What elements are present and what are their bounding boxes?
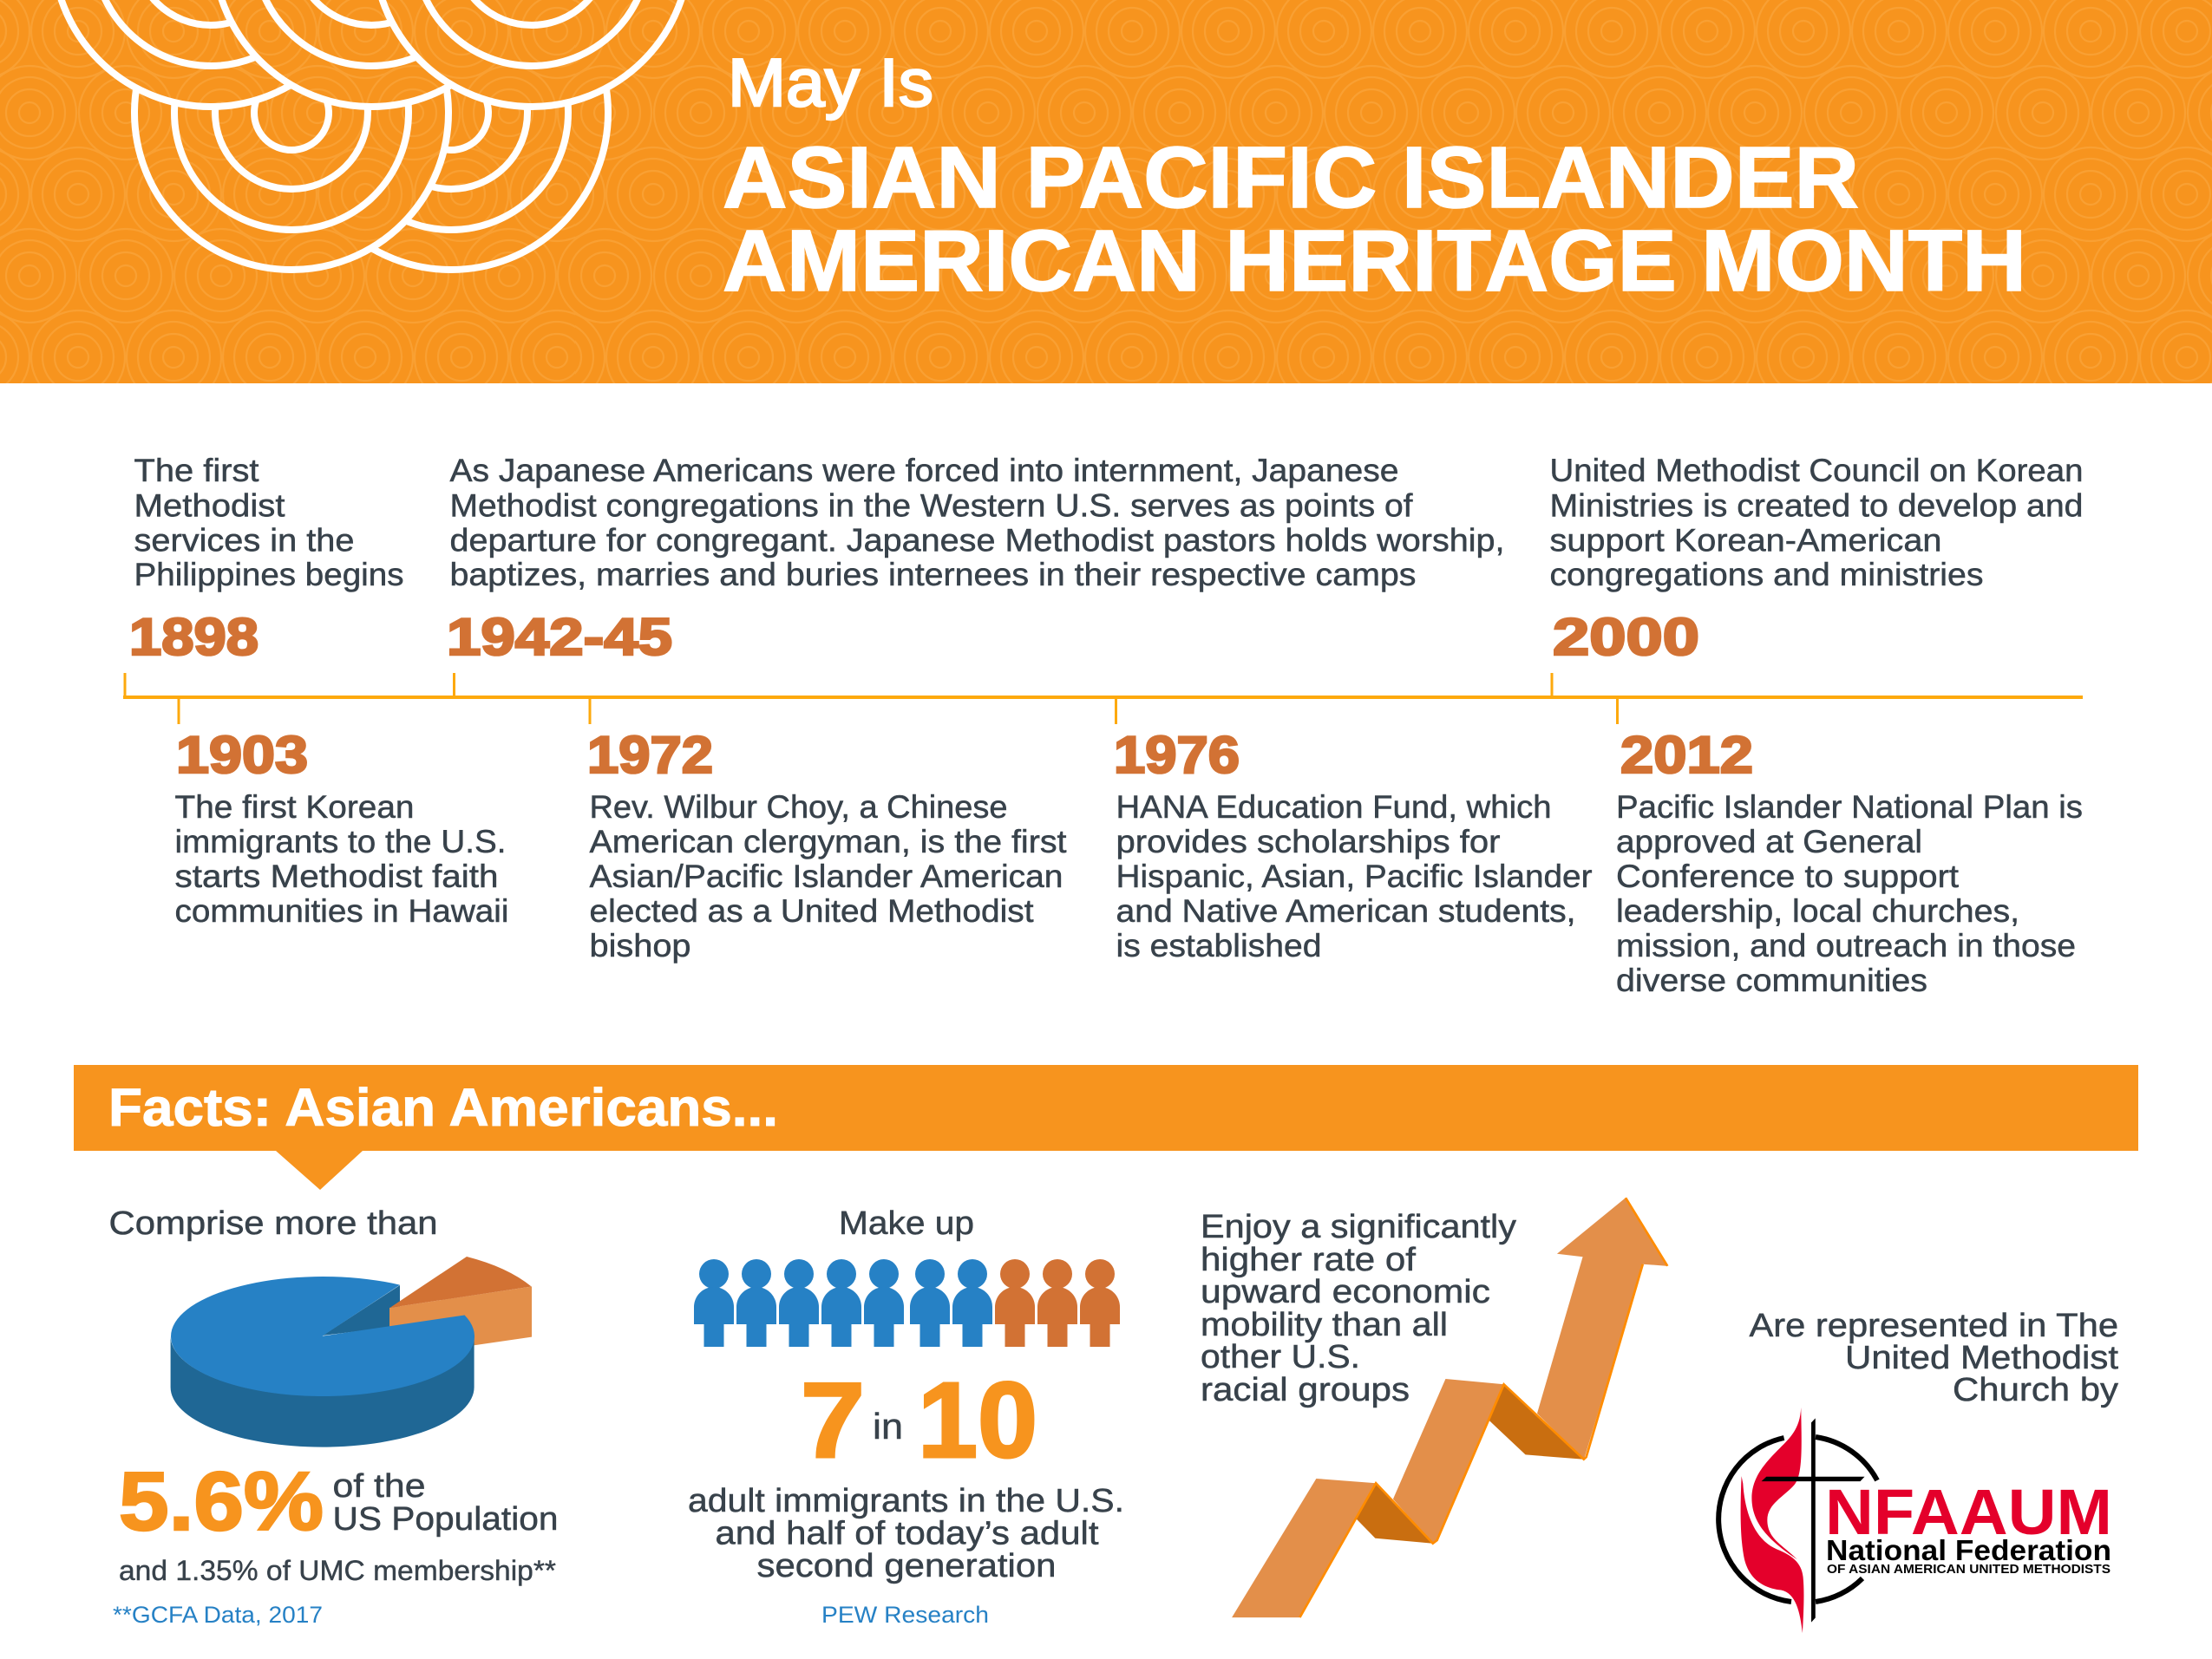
fact panel: population share: 5.6% [119, 1455, 324, 1548]
fact panel: 7 in 10 immigrants: PEW Research [821, 1602, 989, 1628]
fact panel: economic mobility: racial groups [1201, 1372, 1410, 1408]
timeline event: 1942-45: departure for congregant. Japanese Methodist pastors holds worship, [449, 522, 1504, 558]
timeline event: 2000: congregations and ministries [1549, 557, 1983, 592]
timeline event: 1972: bishop [590, 928, 690, 963]
fact panel: economic mobility: other U.S. [1201, 1339, 1360, 1375]
fact panel: economic mobility: upward economic [1201, 1274, 1490, 1310]
header banner [0, 0, 2212, 383]
timeline event: 2012: Conference to support [1616, 859, 1960, 894]
fact panel: population share [109, 1205, 559, 1628]
fact panel: 7 in 10 immigrants [688, 1205, 1124, 1628]
icon: rising zigzag arrow [1232, 1198, 1667, 1617]
logo: NFAAUM cross and flame: NFAAUM [1825, 1476, 2112, 1548]
timeline axis [123, 673, 2083, 724]
logo: NFAAUM cross and flame [1718, 1408, 2112, 1633]
fact panel: population share: **GCFA Data, 2017 [113, 1602, 323, 1628]
timeline event: 1972: American clergyman, is the first [590, 824, 1067, 859]
timeline event: 2012: leadership, local churches, [1616, 893, 2019, 929]
fact panel: population share: US Population [333, 1501, 559, 1538]
timeline event: 1903: immigrants to the U.S. [175, 824, 507, 859]
fact panel: 7 in 10 immigrants: in [873, 1406, 903, 1447]
timeline event: 2000: United Methodist Council on Korean [1549, 453, 2084, 488]
timeline event: 1898 [129, 453, 403, 666]
timeline event: 1942-45: baptizes, marries and buries internees in their respective camps [449, 557, 1416, 592]
facts heading bar [74, 1065, 2138, 1190]
fact panel: represented by NFAAUM: Are represented in The [1749, 1308, 2118, 1344]
timeline event: 1972: elected as a United Methodist [590, 893, 1034, 929]
title: ASIAN PACIFIC ISLANDER [723, 129, 1859, 226]
fact panel: population share: Comprise more than [109, 1205, 437, 1242]
timeline event: 1903 [175, 726, 508, 929]
timeline event: 2012 [1616, 726, 2083, 998]
icon: concentric circles emblem [53, 0, 690, 270]
timeline event: 2012: mission, and outreach in those [1616, 928, 2076, 963]
timeline event: 2012: 2012 [1620, 726, 1753, 784]
title: May Is [728, 44, 933, 121]
fact panel: 7 in 10 immigrants: 7 [801, 1362, 865, 1480]
timeline event: 1976 [1114, 726, 1593, 963]
fact panel: population share: and 1.35% of UMC membership** [119, 1555, 556, 1586]
title [723, 44, 2026, 310]
timeline event: 1976: and Native American students, [1116, 893, 1575, 929]
timeline event: 1976: Hispanic, Asian, Pacific Islander [1116, 859, 1593, 894]
fact panel: 7 in 10 immigrants: second generation [756, 1548, 1057, 1584]
timeline event: 1976: is established [1116, 928, 1322, 963]
timeline event: 1972 [587, 726, 1067, 963]
fact panel: economic mobility: Enjoy a significantly [1201, 1209, 1516, 1245]
timeline event: 1903: communities in Hawaii [175, 893, 508, 929]
timeline event: 1898: Methodist [134, 487, 285, 524]
timeline event: 1976: HANA Education Fund, which [1116, 789, 1551, 825]
timeline event: 1942-45: 1942-45 [447, 608, 672, 666]
fact panel: represented by NFAAUM: United Methodist [1845, 1340, 2118, 1376]
timeline event: 1898: 1898 [129, 608, 259, 666]
timeline event: 1972: Rev. Wilbur Choy, a Chinese [590, 789, 1008, 825]
timeline event: 2000: 2000 [1553, 608, 1699, 666]
logo: NFAAUM cross and flame: National Federation [1826, 1534, 2111, 1566]
logo: NFAAUM cross and flame: OF ASIAN AMERICAN UNITED METHODISTS [1827, 1563, 2111, 1577]
timeline event: 1972: 1972 [587, 726, 713, 784]
timeline event: 1976: 1976 [1114, 726, 1240, 784]
timeline event: 2012: approved at General [1616, 824, 1922, 859]
timeline event: 2012: Pacific Islander National Plan is [1616, 789, 2083, 825]
fact panel: economic mobility: higher rate of [1201, 1242, 1416, 1278]
title: AMERICAN HERITAGE MONTH [723, 212, 2026, 310]
timeline event: 2000: support Korean-American [1549, 522, 1941, 558]
timeline event: 2000: Ministries is created to develop and [1549, 487, 2084, 524]
timeline event: 1898: services in the [134, 522, 354, 558]
fact panel: 7 in 10 immigrants: 10 [918, 1362, 1037, 1480]
fact panel: population share: of the [333, 1468, 425, 1505]
facts heading bar: Facts: Asian Americans... [108, 1078, 778, 1137]
pie chart [171, 1257, 532, 1447]
fact panel: economic mobility [1201, 1198, 1667, 1617]
timeline event: 1942-45: As Japanese Americans were forced into internment, Japanese [449, 453, 1398, 488]
pictogram: ten people [694, 1259, 1120, 1347]
timeline event: 1942-45: Methodist congregations in the Western U.S. serves as points of [449, 487, 1413, 524]
timeline event: 1898: Philippines begins [134, 557, 403, 592]
timeline event: 1898: The first [134, 453, 259, 488]
timeline event: 1976: provides scholarships for [1116, 824, 1501, 859]
timeline event: 1903: The first Korean [175, 789, 415, 825]
fact panel: 7 in 10 immigrants: Make up [839, 1205, 974, 1242]
timeline event: 1972: Asian/Pacific Islander American [590, 859, 1063, 894]
timeline event: 2000 [1549, 453, 2084, 666]
timeline event: 1903: 1903 [176, 726, 308, 784]
fact panel: represented by NFAAUM: Church by [1953, 1372, 2118, 1408]
timeline event: 1903: starts Methodist faith [175, 859, 498, 894]
timeline event: 2012: diverse communities [1616, 963, 1927, 998]
fact panel: 7 in 10 immigrants: and half of today’s adult [715, 1516, 1099, 1552]
timeline event: 1942-45 [447, 453, 1504, 666]
fact panel: represented by NFAAUM [1718, 1308, 2118, 1633]
fact panel: 7 in 10 immigrants: adult immigrants in the U.S. [688, 1483, 1124, 1519]
fact panel: economic mobility: mobility than all [1201, 1307, 1448, 1343]
